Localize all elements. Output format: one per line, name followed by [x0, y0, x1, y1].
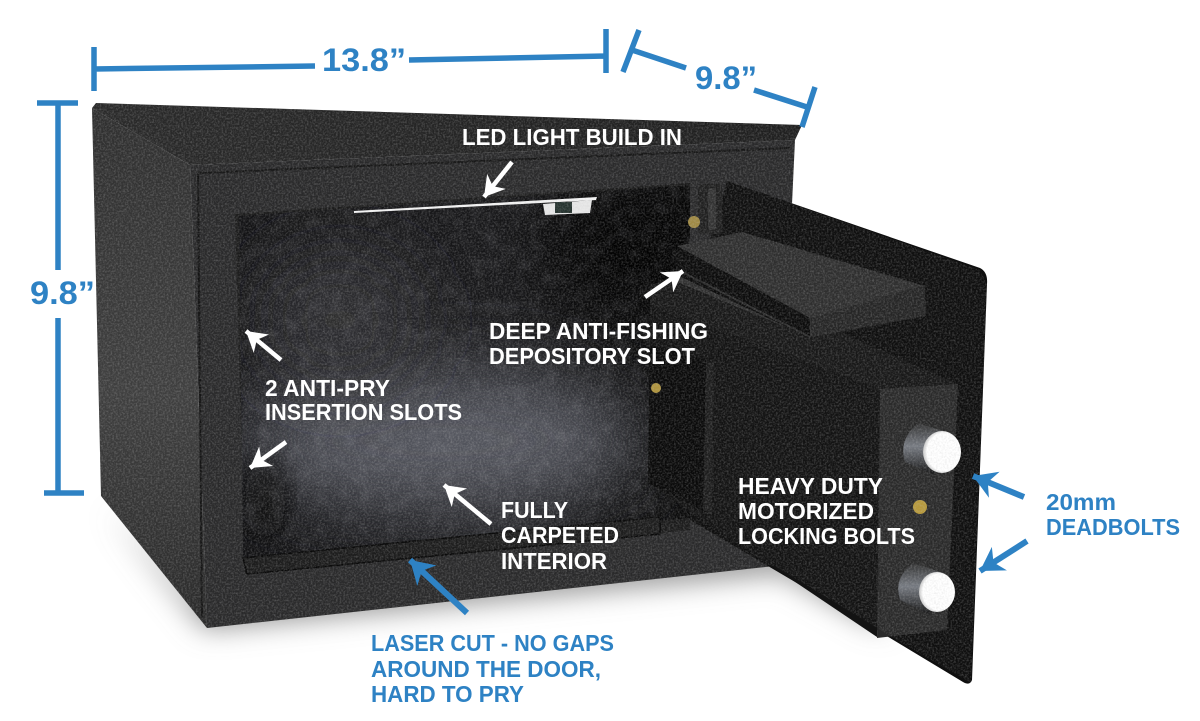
label: LED light: LED LIGHT BUILD IN	[462, 124, 682, 150]
label: carpeted interior	[444, 485, 619, 574]
open door	[648, 181, 987, 684]
LED light	[354, 197, 597, 215]
label: carpeted interior: CARPETED	[501, 522, 619, 548]
label: depository slot: DEEP ANTI-FISHING	[489, 318, 708, 344]
dimension: width: 13.8”	[322, 42, 406, 78]
left side face	[92, 108, 207, 628]
label: deadbolts: DEADBOLTS	[1046, 514, 1180, 540]
label: carpeted interior: INTERIOR	[501, 548, 607, 574]
upper bolt	[903, 423, 961, 475]
label: laser cut	[371, 560, 614, 707]
bottom ledge	[243, 517, 660, 574]
label: depository slot: DEPOSITORY SLOT	[489, 343, 695, 369]
floor shadow	[110, 510, 885, 630]
front plate	[190, 140, 795, 628]
safe body	[92, 103, 802, 628]
label: carpeted interior: FULLY	[501, 497, 568, 523]
label: locking bolts: MOTORIZED	[738, 498, 874, 524]
label: laser cut: LASER CUT - NO GAPS	[371, 630, 614, 656]
label: laser cut: AROUND THE DOOR,	[371, 656, 601, 682]
label: anti-pry slots	[246, 331, 462, 468]
carpeted interior	[239, 186, 690, 557]
dimension: height: 9.8”	[30, 275, 95, 311]
label: deadbolts: 20mm	[1046, 489, 1116, 515]
door plate	[690, 181, 987, 684]
label: anti-pry slots: 2 ANTI-PRY	[265, 375, 390, 401]
lock housing front	[877, 384, 958, 638]
lock housing side	[648, 305, 880, 637]
dimension: depth: 9.8”	[695, 60, 757, 96]
label: anti-pry slots: INSERTION SLOTS	[265, 399, 462, 425]
dimension: height	[30, 103, 95, 493]
battery cover	[648, 345, 714, 515]
label: locking bolts	[738, 473, 915, 549]
label: locking bolts: LOCKING BOLTS	[738, 523, 915, 549]
speckle texture	[92, 103, 987, 682]
depository slot	[677, 232, 925, 337]
hinge	[688, 184, 722, 234]
label: locking bolts: HEAVY DUTY	[738, 473, 883, 499]
dimension: depth	[623, 30, 815, 127]
label: deadbolts	[973, 476, 1180, 571]
top face	[92, 103, 802, 165]
label: laser cut: HARD TO PRY	[371, 681, 524, 707]
door screw	[913, 500, 927, 514]
lock housing top	[650, 270, 958, 389]
lower bolt	[898, 563, 955, 615]
dimension: width	[94, 29, 606, 91]
label: depository slot	[489, 271, 708, 369]
label: LED light	[462, 124, 682, 197]
